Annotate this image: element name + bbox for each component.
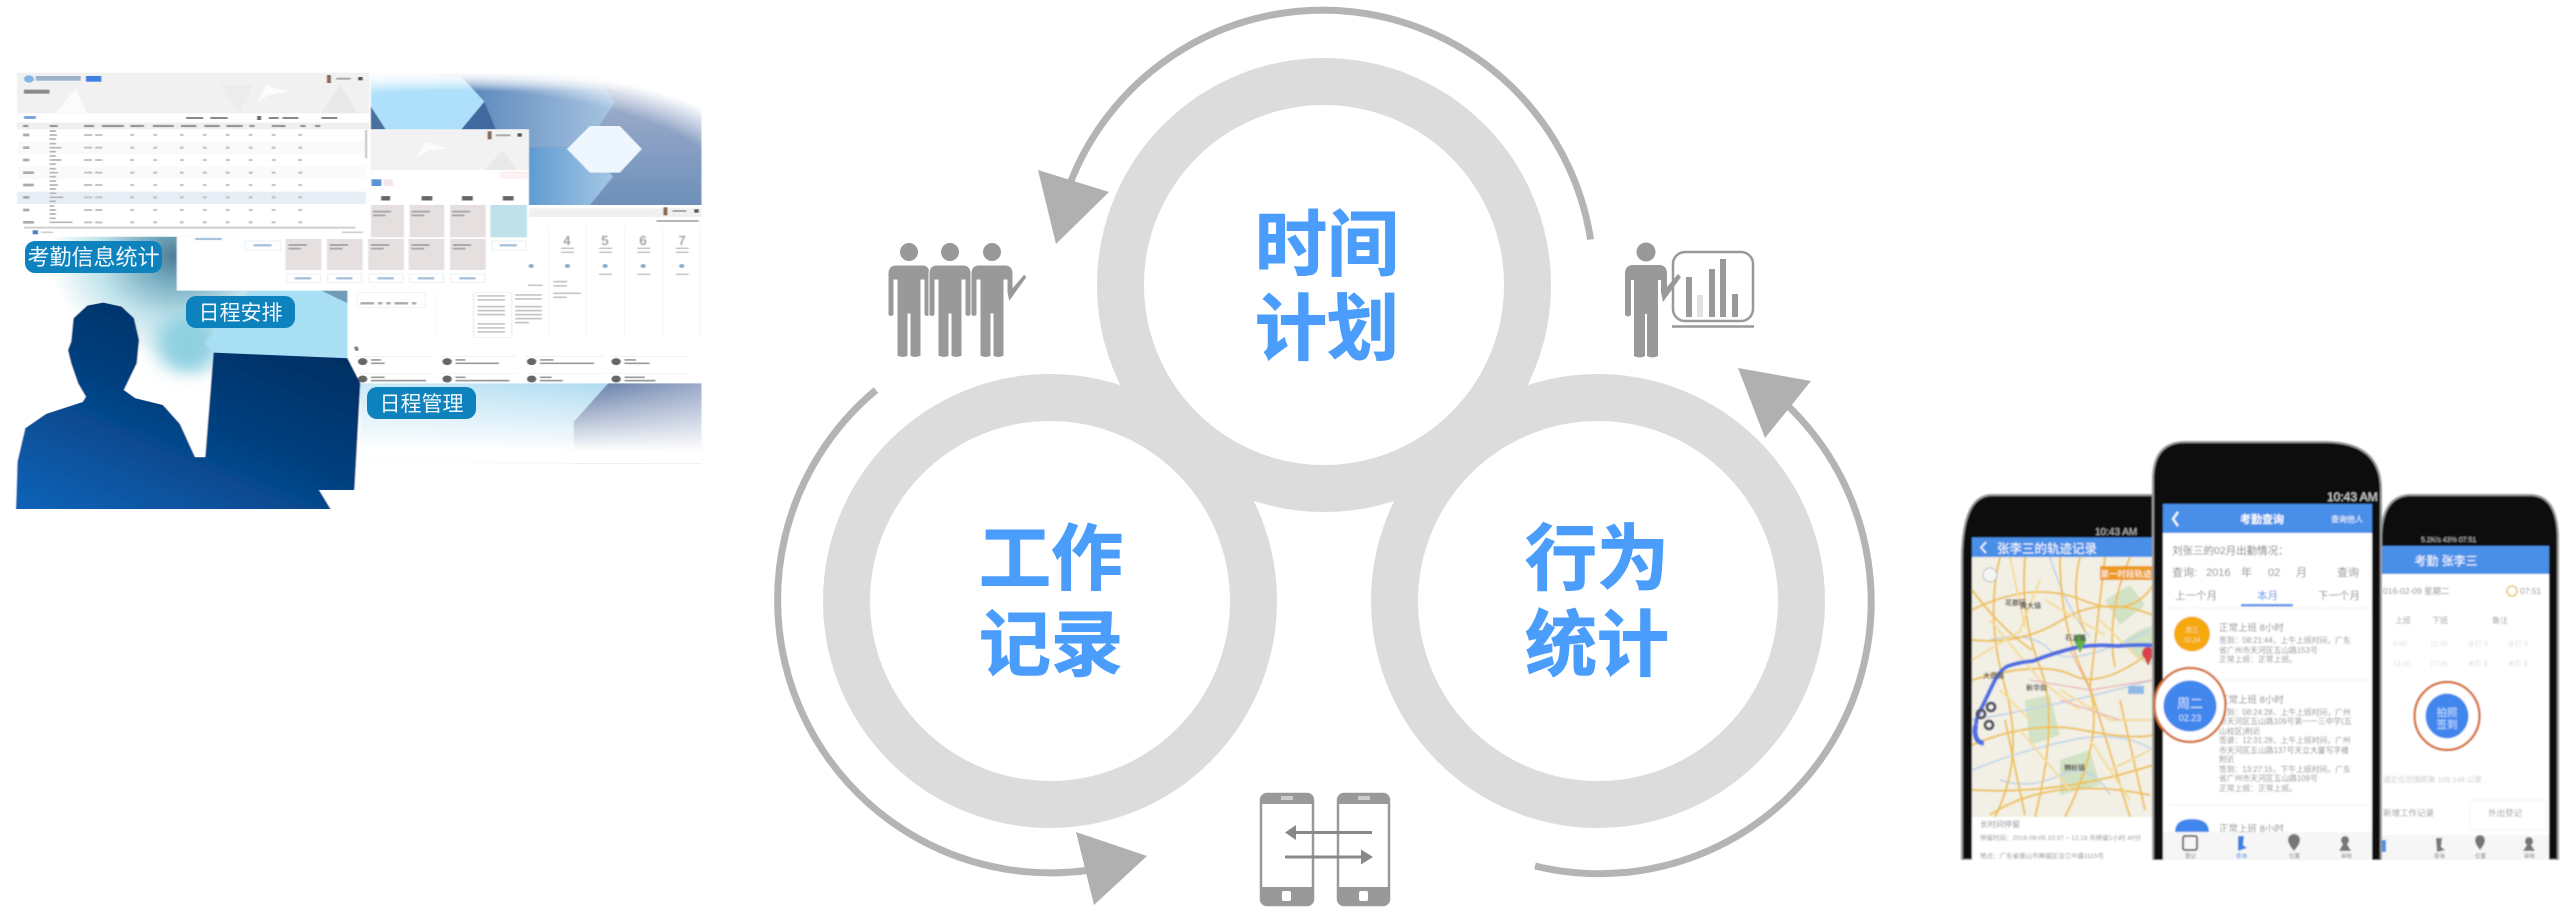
arrow: right arc xyxy=(1535,368,1871,874)
heading: time plan: 计划 xyxy=(1255,270,1399,375)
map: 大沥镇 xyxy=(1983,671,2004,680)
weekly schedule screenshot xyxy=(177,129,529,291)
heading: work record: 记录 xyxy=(979,586,1123,691)
phone: attendance query: 山校区)附近 xyxy=(2219,726,2261,736)
tab bar: 审核 xyxy=(2341,852,2352,860)
phone: attendance query: 下一个月 xyxy=(2318,590,2360,602)
map: 黄大镇 xyxy=(2020,601,2041,610)
phone: attendance query: 正常上班 8小时 xyxy=(2219,622,2284,634)
phone: map track record: 长时间停留 xyxy=(1980,819,2020,829)
label: schedule arrangement xyxy=(186,296,295,328)
label: schedule management: 日程管理 xyxy=(380,393,464,416)
phone: sign in: 8:30 xyxy=(2393,641,2407,648)
button: photo sign in: 签到 xyxy=(2436,718,2458,731)
ring: work record xyxy=(846,398,1254,804)
phone: attendance query xyxy=(2153,442,2381,862)
day marker: highlighted: 02.23 xyxy=(2179,713,2201,723)
phone: attendance query: 正常上班 8小时 xyxy=(2219,823,2284,835)
phone: sign in: 备注 xyxy=(2492,615,2508,625)
week day numbers: 5 xyxy=(601,233,609,248)
phone: sign in: 或定位范围距离 109.148 公里 xyxy=(2383,774,2482,784)
phone: sign in: 审核 xyxy=(2524,852,2536,860)
phone: attendance query: 签退：12:31:28，上午上班时间，广州 xyxy=(2219,735,2351,745)
day marker: highlighted: 周二 xyxy=(2177,696,2203,711)
phone: map track record: 地点：广东省佛山市禅城区沿江中路1115号 xyxy=(1980,851,2104,860)
phone: sign in: 位置 xyxy=(2475,852,2486,860)
phone: sign in: 5.2K/s 43% 07:51 xyxy=(2421,537,2476,544)
phone: attendance query: 正常上班：正常上班。 xyxy=(2219,783,2297,793)
tab bar: 登记 xyxy=(2185,852,2196,860)
button: photo sign in xyxy=(2414,682,2480,750)
phone: attendance query: 查询他人 xyxy=(2331,514,2363,524)
phone: attendance query: 附近 xyxy=(2219,754,2235,764)
phone: attendance query: 2016 xyxy=(2206,567,2230,579)
phone: attendance query: 签到：08:24:28，上午上班时间，广州 xyxy=(2219,707,2351,717)
label: attendance statistics: 考勤信息统计 xyxy=(27,245,160,270)
phone: sign in xyxy=(2381,495,2558,860)
panel: desktop screenshots collage xyxy=(16,72,704,509)
arrow: top arc xyxy=(1038,10,1591,244)
phone: sign in: 新增工作记录 xyxy=(2383,808,2435,818)
heading: behaviour statistics: 行为 xyxy=(1525,500,1669,605)
map: 狮岭镇 xyxy=(2064,763,2085,772)
phone: attendance query: 省广州市天河区五山路109号 xyxy=(2219,773,2318,783)
phone: sign in: 未打卡 xyxy=(2468,639,2489,648)
phone: sign in: 016-02-09 星期二 xyxy=(2383,586,2450,596)
phone: attendance query: 签到：13:27:15，下午上班时间，广东 xyxy=(2219,764,2351,774)
phone: attendance query: 正常上班 8小时 xyxy=(2219,694,2284,706)
phone: attendance query: 10:43 AM xyxy=(2327,490,2378,504)
phone bottom crop xyxy=(1950,860,2568,872)
phone: attendance query: 月 xyxy=(2296,567,2307,579)
tab bar: 位置 xyxy=(2289,852,2300,860)
phone: sign in: 下班 xyxy=(2432,615,2448,625)
phone: attendance query: 年 xyxy=(2241,565,2252,579)
phone: attendance query: 02 xyxy=(2268,567,2280,579)
label: schedule arrangement: 日程安排 xyxy=(198,302,282,325)
phone: attendance query: 考勤查询 xyxy=(2240,512,2284,526)
day marker: orange xyxy=(2174,616,2210,652)
phone: attendance query: 省广州市天河区五山路153号 xyxy=(2219,645,2318,655)
phone: sign in: 查询 xyxy=(2434,852,2446,860)
collage teal background xyxy=(16,237,360,509)
phone: map track record xyxy=(1962,495,2183,860)
icon: two phones exchanging data xyxy=(1261,794,1389,905)
phone: map track record: 张李三的轨迹记录 xyxy=(1997,541,2097,556)
silhouette: person xyxy=(16,303,360,509)
heading: work record: 工作 xyxy=(979,500,1123,605)
ring: time plan xyxy=(1120,82,1528,488)
week day numbers: 7 xyxy=(678,233,686,248)
phone: sign in: 考勤 张李三 xyxy=(2414,553,2478,568)
phone: attendance query: 上一个月 xyxy=(2175,590,2217,602)
phone: attendance query: 查询: xyxy=(2172,565,2197,579)
heading: time plan: 时间 xyxy=(1255,186,1399,291)
phone: sign in: 未打卡 xyxy=(2508,659,2529,668)
phone: sign in: 13:30 xyxy=(2393,661,2411,668)
phone: attendance query: 签到：08:21:44，上午上班时间，广东 xyxy=(2219,635,2351,645)
phone: attendance query: 正常上班：正常上班。 xyxy=(2219,654,2297,664)
panel: central three ring cycle xyxy=(778,10,1871,905)
phone: sign in: 上班 xyxy=(2395,615,2411,625)
day marker: orange: 02.24 xyxy=(2184,637,2201,644)
phone: sign in: 外出登记 xyxy=(2488,808,2523,818)
phone: sign in: 07:51 xyxy=(2520,586,2542,596)
schedule management screenshot xyxy=(348,205,702,383)
phone: attendance query: 本月 xyxy=(2257,589,2278,602)
map: 花都区 xyxy=(2005,598,2026,607)
icon: three people xyxy=(888,242,1027,358)
week day numbers xyxy=(563,233,686,248)
phone: attendance query: 刘张三的02月出勤情况： xyxy=(2172,544,2289,557)
ring: behaviour statistics xyxy=(1394,398,1802,804)
label: schedule management xyxy=(367,387,476,419)
phone: attendance query: 市天河区五山路137号天立大厦写字楼 xyxy=(2219,745,2349,755)
icon: presenter with bar chart xyxy=(1625,242,1754,358)
phone: attendance query: 查询 xyxy=(2337,565,2359,579)
phone: map track record: 停留时间：2016-09-05 10:37 ~ 12:18 共停留1小时 40分 xyxy=(1980,833,2141,842)
phone: sign in: 12:00 xyxy=(2430,641,2448,648)
map: 石龙镇 xyxy=(2065,633,2086,642)
tab bar: 查询 xyxy=(2236,852,2248,860)
phone: attendance query: 市天河区五山路109号第一一三中学(五 xyxy=(2219,716,2352,726)
tab bar xyxy=(2163,832,2372,862)
button: photo sign in: 拍照 xyxy=(2436,706,2458,719)
phone: sign in: 17:30 xyxy=(2430,661,2448,668)
map: 第一时段轨迹 xyxy=(2100,569,2152,579)
hexagon background top right xyxy=(371,72,704,208)
week day numbers: 6 xyxy=(639,233,647,248)
phone: map track record: 10:43 AM xyxy=(2095,527,2137,538)
week day numbers: 4 xyxy=(563,233,571,248)
attendance statistics screenshot xyxy=(17,73,370,237)
phone: sign in: 未打卡 xyxy=(2468,659,2489,668)
panel: mobile app screenshots xyxy=(1950,442,2568,872)
heading: behaviour statistics: 统计 xyxy=(1525,586,1669,691)
map: 新华街 xyxy=(2026,683,2047,692)
arrow: left arc xyxy=(778,390,1147,905)
phone: sign in: 未打卡 xyxy=(2508,639,2529,648)
map xyxy=(1972,557,2183,817)
day marker: highlighted xyxy=(2154,668,2226,742)
lower blue band xyxy=(360,383,702,463)
day marker: orange: 周三 xyxy=(2186,626,2199,634)
